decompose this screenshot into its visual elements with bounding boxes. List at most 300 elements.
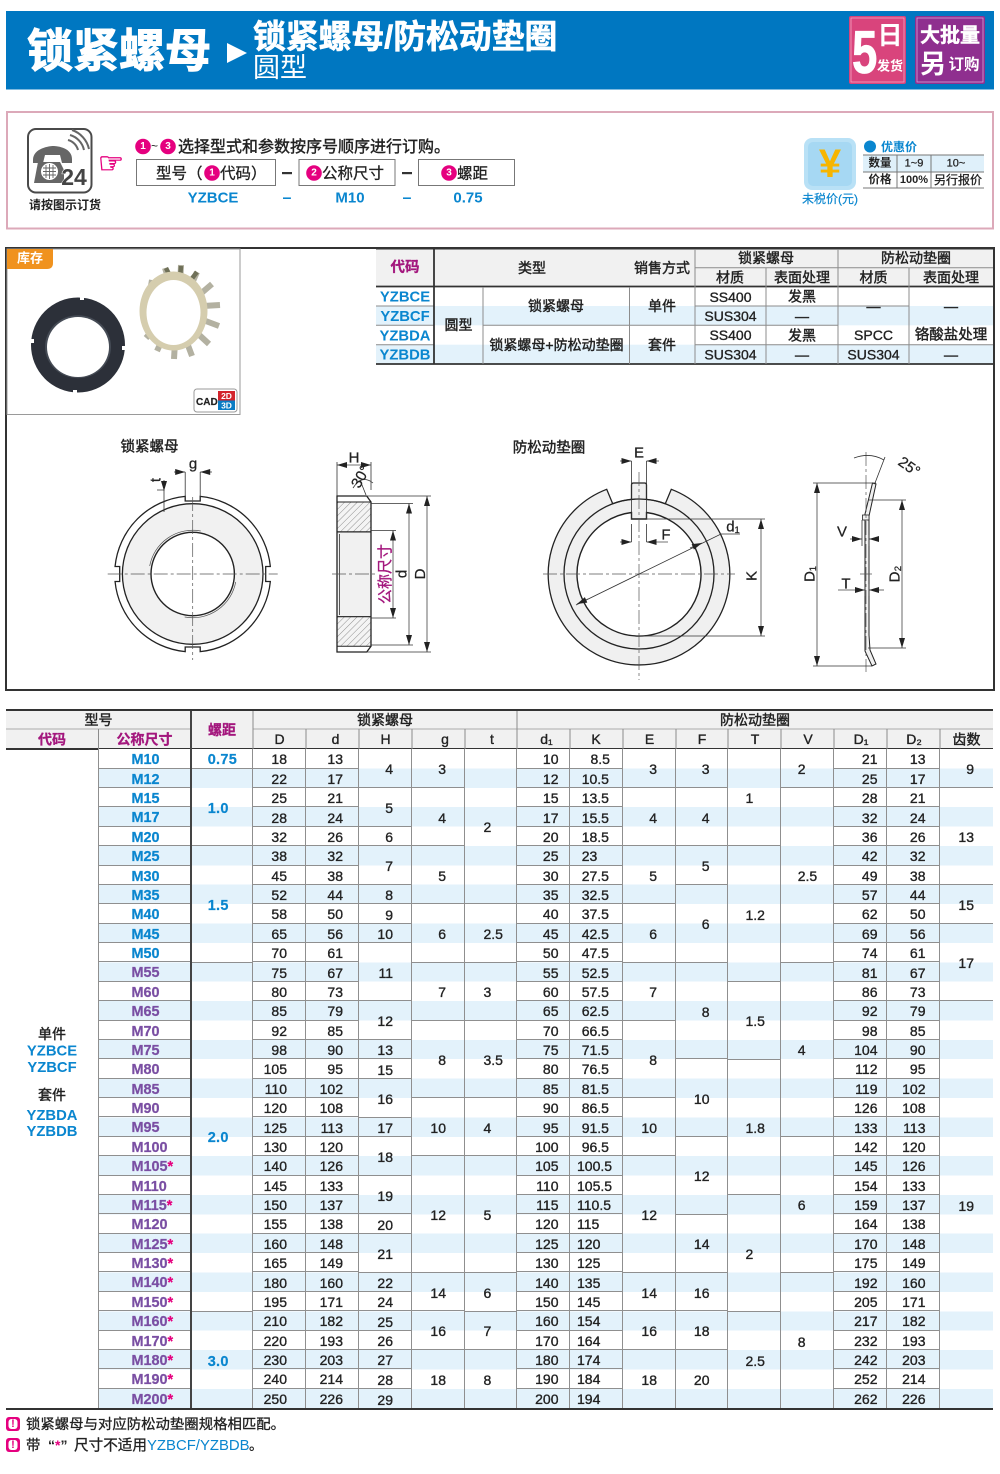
column: nominal size: M105 [132,1159,168,1175]
column: H [359,749,412,1409]
drawing: lock washer section view: D₂ [886,565,904,582]
order code box: nominal size: 公称尺寸 [322,164,384,182]
column: d1: 45 [543,926,558,942]
spec table: header row [390,250,979,286]
spec table: type column [444,298,676,353]
column: D1: 145 [854,1158,878,1174]
column: d: 171 [320,1294,343,1310]
column: d: 193 [320,1333,343,1349]
column: K: 91.5 [582,1120,609,1136]
spec table: lock nut materials: SS400 [709,327,752,343]
dimension table [6,749,993,1410]
column: d: 203 [320,1352,343,1368]
column: t: 2 [484,819,491,835]
column: H: 22 [377,1275,393,1291]
column: D1: 252 [854,1371,878,1387]
column: K: 23 [582,848,597,864]
column: teeth count: 15 [958,897,974,913]
drawing: lock nut section view [332,450,431,652]
note 2: 带 [26,1437,40,1454]
column: nominal size: M45 [132,927,160,943]
column: d: 17 [327,771,343,787]
column: K: 120 [577,1236,600,1252]
column: E: 14 [641,1285,657,1301]
column: D1 [834,749,887,1409]
column: t: 4 [484,1120,491,1136]
column: D2: 32 [910,848,926,864]
column: nominal size: M70 [132,1024,160,1040]
discount price table: 10~ [947,158,965,170]
column: d1: 30 [543,868,558,884]
column: t: 2.5 [484,926,503,942]
order code box: pitch: 螺距 [457,164,488,182]
column: D2: 21 [910,790,926,806]
column: K: 115 [577,1216,599,1232]
column: F [676,749,728,1409]
order code box: type: 型号（ [156,164,203,182]
column: D1: 25 [862,771,878,787]
column: V: 8 [798,1334,805,1350]
column: D: 32 [271,829,287,845]
drawing: lock nut section view: 公称尺寸 [377,544,394,604]
order code box: type: 1 [209,168,215,178]
header: pitch: 螺距 [208,722,236,738]
header: lock nut group: d [332,731,339,747]
column: F: 6 [702,916,710,932]
column: d [306,749,359,1409]
column: nominal size: M95 [132,1120,160,1136]
column: D: 25 [271,790,287,806]
column: K: 27.5 [582,868,609,884]
column: nominal size: M20 [132,830,160,846]
column: d1: 80 [543,1061,558,1077]
column: E: 4 [649,810,657,826]
column: E: 18 [641,1372,657,1388]
column: K: 42.5 [582,926,609,942]
column: d1: 65 [543,1003,558,1019]
column: D: 240 [264,1371,287,1387]
discount price table: 优惠价 [881,139,917,154]
column: nominal size: M85 [132,1082,160,1098]
heading: washer drawing: 防松动垫圈 [513,440,585,456]
column: D1: 42 [862,848,878,864]
column: pitch: 3.0 [208,1354,229,1370]
table header [6,710,993,749]
column: D1: 133 [854,1120,878,1136]
spec table: washer materials: — [944,298,958,314]
column: g: 12 [430,1207,446,1223]
column: d: 133 [320,1178,343,1194]
column: d: 73 [327,984,343,1000]
column: d1: 200 [535,1391,558,1407]
spec table: type column: 单件 [648,298,676,314]
spec table: code column: YZBCE [380,290,430,306]
column: D1: 81 [862,965,878,981]
photo: lock washer [140,265,220,359]
icon: yen tax-free price [804,138,856,190]
column: D: 195 [264,1294,287,1310]
column: F: 20 [694,1372,710,1388]
order example values: YZBCE [188,190,238,206]
column: K: 62.5 [582,1003,609,1019]
column: D1: 175 [854,1255,878,1271]
column: K: 15.5 [582,810,609,826]
column: d1: 110 [536,1178,558,1194]
column: nominal size: M115 [132,1198,167,1214]
column: d1: 115 [536,1197,558,1213]
column: nominal size: M15 [132,791,160,807]
column: d: 182 [320,1313,343,1329]
column: d: 44 [327,887,343,903]
column: K: 135 [577,1275,600,1291]
column: K: 154 [577,1313,600,1329]
spec table: type column: 锁紧螺母+防松动垫圈 [489,337,624,353]
column: D2: 214 [902,1371,926,1387]
column: d1: 150 [535,1294,558,1310]
column: H: 28 [377,1372,393,1388]
header: lock washer group: K [591,731,601,747]
column: H: 18 [377,1149,393,1165]
note 2: ! [11,1439,15,1451]
column: D: 28 [271,810,287,826]
column: d: 138 [320,1216,343,1232]
column: D1: 112 [855,1061,878,1077]
column: d: 56 [327,926,343,942]
column: d1: 85 [543,1081,558,1097]
column: D: 210 [264,1313,287,1329]
column: t: 7 [484,1323,491,1339]
column: K: 174 [577,1352,600,1368]
column: D2: 226 [902,1391,926,1407]
column: d: 24 [327,810,343,826]
spec table: header row: 代码 [390,259,420,276]
column: g: 4 [438,810,446,826]
column: D1: 36 [862,829,878,845]
header: lock washer group: E [645,731,654,747]
column: d: 95 [327,1061,343,1077]
column: nominal size: * [168,1353,173,1369]
column: D: 165 [264,1255,287,1271]
column: nominal size: * [168,1314,173,1330]
column: nominal size: M80 [132,1062,160,1078]
drawing: lock washer section view: 25° [895,454,923,480]
column: D1: 62 [862,906,878,922]
column: nominal size: M170 [132,1334,168,1350]
column: d1: 190 [535,1371,558,1387]
column: D: 155 [264,1216,287,1232]
column: F: 8 [702,1004,710,1020]
column: K: 18.5 [582,829,609,845]
badge: 5 day shipping: 5 [852,20,877,87]
discount price table: 1~9 [905,158,923,170]
column: K: 194 [577,1391,600,1407]
spec table: type column: 圆型 [444,317,472,333]
spec table: header row: 销售方式 [634,260,690,276]
column: D: 18 [271,751,287,767]
column: nominal size: M200 [132,1392,168,1408]
note 1: 锁紧螺母与对应防松动垫圈规格相匹配。 [26,1415,285,1433]
column: D1: 126 [854,1100,878,1116]
column: D1: 57 [862,887,878,903]
column: D1: 164 [854,1216,878,1232]
column: D1: 262 [854,1391,878,1407]
order code box: pitch: 3 [446,168,452,178]
spec table: types and materials [376,248,993,364]
heading: lock nut drawing: 锁紧螺母 [120,438,178,456]
instruction line: 选择型式和参数按序号顺序进行订购。 [178,138,450,156]
column: D1: 232 [854,1333,878,1349]
column: E: 7 [649,984,657,1000]
badge: 5 day shipping: 发货 [877,58,903,74]
column: nominal size [98,749,191,1409]
column: d1: 95 [543,1120,558,1136]
column: t: 5 [484,1207,491,1223]
header: lock washer group: V [803,731,813,747]
column: g: 18 [430,1372,446,1388]
spec table: code column: YZBCF [380,309,430,325]
header: model group: 代码 [38,732,66,748]
subtitle: 锁紧螺母/防松动垫圈 [253,18,557,55]
column: T: 2.5 [746,1353,765,1369]
column: D2: 171 [902,1294,926,1310]
column: E: 10 [641,1120,657,1136]
column: D1: 74 [862,945,878,961]
column: pitch [190,749,253,1409]
column: d1: 35 [543,887,558,903]
column: D: 125 [264,1120,287,1136]
column: d1: 25 [543,848,558,864]
note 2 [6,1437,263,1454]
column: D: 70 [271,945,287,961]
column: H: 27 [377,1352,393,1368]
drawing: lock washer section view: T [841,576,851,592]
spec table: washer materials: SUS304 [847,346,900,362]
column: d: 214 [320,1371,343,1387]
column: E: 16 [641,1323,657,1339]
column: D: 145 [264,1178,287,1194]
badge: bulk order [915,16,985,84]
column: nominal size: * [167,1198,172,1214]
header: lock washer group: F [698,731,706,747]
panel: ordering guide [7,112,993,228]
column: F: 3 [702,761,710,777]
column: d1: 70 [543,1023,558,1039]
drawing: lock nut section view: d [394,570,410,578]
column: d: 137 [320,1197,343,1213]
column: d: 38 [327,868,343,884]
column: D2: 138 [902,1216,926,1232]
column: H: 10 [377,926,393,942]
column: D2: 79 [910,1003,926,1019]
column: d: 102 [320,1081,343,1097]
column: D: 22 [271,771,287,787]
column: D: 250 [264,1391,287,1407]
spec table: lock nut materials: — [795,347,809,363]
column: H: 20 [377,1217,393,1233]
column: D2: 56 [910,926,926,942]
discount price table: 价格 [868,172,892,186]
column: K: 110.5 [577,1197,611,1213]
column: g: 5 [438,868,446,884]
column: V: 6 [798,1197,805,1213]
code column labels: YZBCE [27,1044,77,1060]
column: d1: 55 [543,965,558,981]
order example values: 0.75 [453,190,483,206]
column: d1: 140 [535,1275,558,1291]
spec table: washer materials: — [866,298,880,314]
column: g: 14 [430,1285,446,1301]
column: K: 96.5 [582,1139,609,1155]
column: t: 3 [484,984,491,1000]
column: H: 12 [377,1013,393,1029]
column: T: 1.5 [746,1013,765,1029]
column: g: 10 [430,1120,446,1136]
note 2: YZBCF/YZBDB [147,1438,250,1454]
column: nominal size: M140 [132,1275,168,1291]
column: teeth count: 17 [958,955,974,971]
instruction line: ~ [151,139,158,153]
photo: lock nut [30,296,126,394]
drawing: lock washer section view: V [837,524,847,540]
column: D2: 13 [910,751,926,767]
column: H: 4 [385,761,393,777]
column: F: 12 [694,1168,710,1184]
stock tag: 库存 [17,250,43,266]
code column labels: YZBDB [27,1124,78,1140]
column: F: 16 [694,1285,710,1301]
column: g: 6 [438,926,446,942]
spec table: header row: 表面处理 [923,270,979,286]
column: H: 7 [385,858,393,874]
column: H: 11 [378,965,393,981]
column: nominal size: * [168,1275,173,1291]
column: nominal size: M150 [132,1295,168,1311]
spec table: lock nut materials: SUS304 [704,308,757,324]
column: nominal size: M60 [132,985,160,1001]
code column labels: YZBCF [27,1060,77,1076]
column: D2: 38 [910,868,926,884]
column: d: 90 [327,1042,343,1058]
subtitle: shape: 圆型 [253,53,307,83]
column: K: 13.5 [582,790,609,806]
column: nominal size: M100 [132,1140,168,1156]
spec table: washer materials: 铬酸盐处理 [915,326,988,343]
column: nominal size: M180 [132,1353,168,1369]
column: D2: 61 [910,945,926,961]
column: D2: 113 [903,1120,926,1136]
column: K: 184 [577,1371,600,1387]
column: D2: 133 [902,1178,926,1194]
column: D: 98 [271,1042,287,1058]
column: d1: 20 [543,829,558,845]
badge: 5 day shipping: 日 [877,22,903,50]
column: D2: 182 [902,1313,926,1329]
header: lock nut group: 锁紧螺母 [357,712,413,728]
column: nominal size: M160 [132,1314,168,1330]
column: H: 9 [385,907,393,923]
column: D: 180 [264,1275,287,1291]
column: K: 8.5 [590,751,610,767]
column: nominal size: M55 [132,965,160,981]
icon: yen tax-free price: ¥ [819,142,842,186]
column: d1: 40 [543,906,558,922]
header: model group: 型号 [84,712,112,728]
order example values: – [403,190,412,206]
column: D1: 98 [862,1023,878,1039]
header: lock washer group [540,712,980,748]
column: d1: 130 [535,1255,558,1271]
note 2: 尺寸不适用 [74,1437,147,1454]
column: teeth count: 19 [958,1198,974,1214]
code column labels: 单件 [38,1026,66,1042]
column: E [623,749,676,1409]
column: d: 108 [320,1100,343,1116]
column: D2: 67 [910,965,926,981]
column: D: 45 [271,868,287,884]
column: E: 12 [641,1207,657,1223]
column: D1: 28 [862,790,878,806]
header: model group: 公称尺寸 [116,732,172,748]
column: D2: 73 [910,984,926,1000]
column: g: 7 [438,984,446,1000]
drawing: lock nut section view: 30° [348,463,374,491]
separator dash [282,172,292,174]
column: D1: 242 [854,1352,878,1368]
column: d1: 170 [535,1333,558,1349]
column: D1: 49 [862,868,878,884]
column: d: 85 [327,1023,343,1039]
column: pitch: 1.0 [208,801,229,817]
column: d1 [517,749,570,1409]
order example values: – [283,190,292,206]
column: nominal size: * [168,1256,173,1272]
column: E: 8 [649,1052,657,1068]
column: nominal size: M190 [132,1372,168,1388]
column: H: 26 [377,1333,393,1349]
column: D1: 159 [854,1197,878,1213]
column: D2: 126 [902,1158,926,1174]
header: lock nut group: H [380,731,391,747]
column: K: 105.5 [577,1178,612,1194]
column: D: 80 [271,984,287,1000]
spec table: lock nut materials: 发黑 [788,288,816,304]
column: D: 220 [264,1333,287,1349]
column: t: 8 [484,1372,491,1388]
column: K [570,749,623,1409]
column: nominal size: M25 [132,849,160,865]
drawing: lock washer front view: E [634,444,644,462]
stock tag [7,249,53,269]
column: nominal size: M130 [132,1256,168,1272]
column: D2: 137 [902,1197,926,1213]
header: model group [38,712,172,748]
spec table: type column: 套件 [648,337,676,353]
column: d: 148 [320,1236,343,1252]
column: d1: 17 [543,810,558,826]
column: D: 105 [264,1061,287,1077]
column: nominal size: M10 [132,752,160,768]
order example values [188,190,483,206]
icon: CAD 2D 3D [194,389,237,412]
column: D2: 203 [902,1352,926,1368]
column: nominal size: M30 [132,869,160,885]
code column labels: YZBDA [27,1108,78,1124]
column: F: 14 [694,1236,710,1252]
column: T: 2 [746,1246,753,1262]
column: d: 61 [327,945,343,961]
spec table: washer materials [847,298,988,363]
column: H: 19 [377,1188,393,1204]
